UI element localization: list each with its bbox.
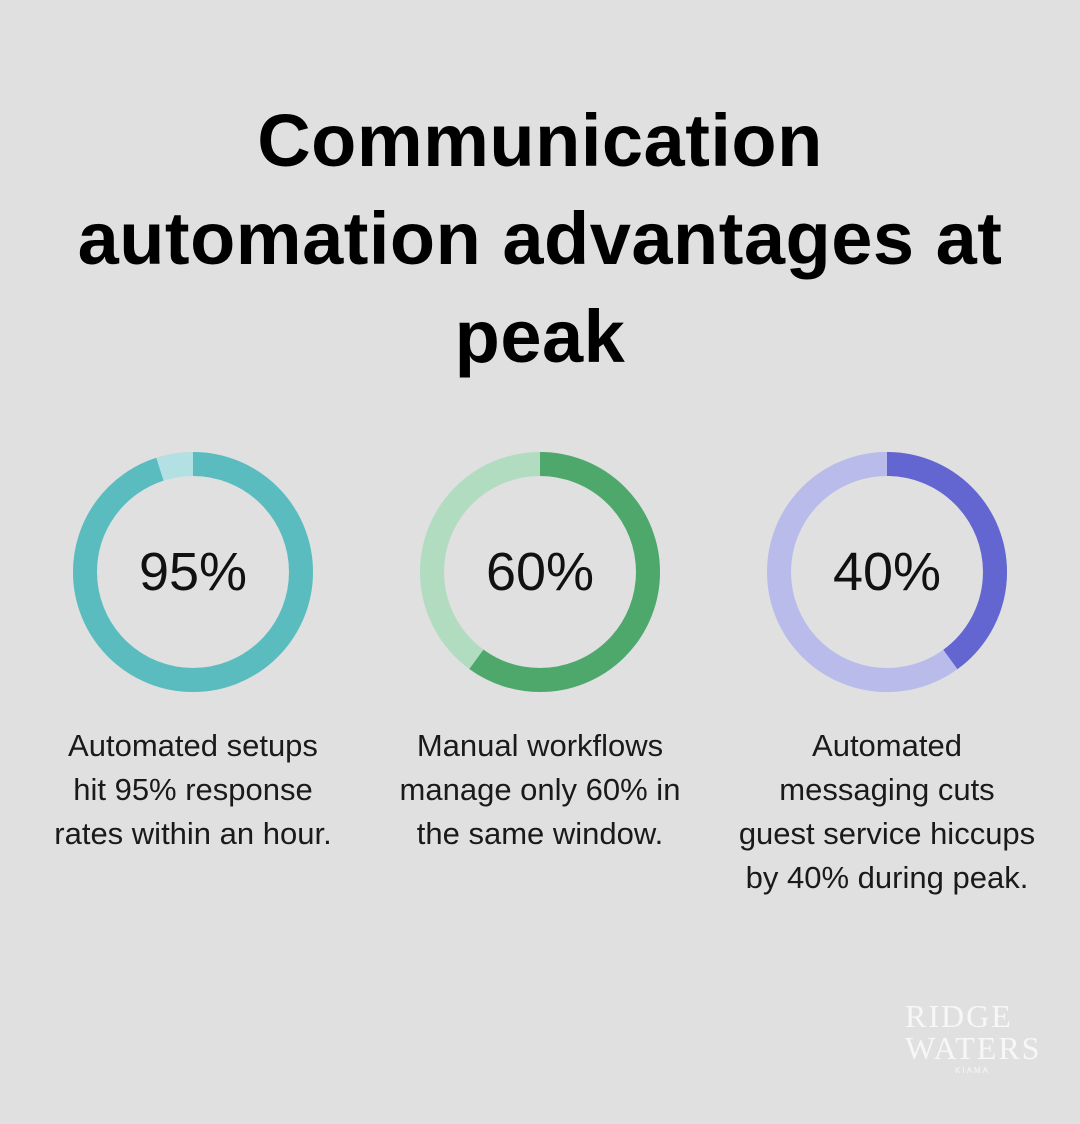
- ring: 60%: [420, 452, 660, 692]
- logo: [905, 998, 1041, 1075]
- logo: WATERS: [905, 1030, 1041, 1066]
- text: 40% description: Automated: [812, 728, 962, 763]
- text: 60% description: [400, 728, 680, 851]
- title: Communication: [257, 99, 823, 182]
- text: 95% description: hit 95% response: [73, 772, 313, 807]
- text: 95% description: Automated setups: [68, 728, 318, 763]
- ring: 95%: [73, 452, 313, 692]
- logo: KIAMA: [955, 1066, 990, 1075]
- ring: 60%: 60%: [486, 542, 594, 602]
- title: [78, 99, 1002, 378]
- text: 60% description: Manual workflows: [417, 728, 663, 763]
- text: 95% description: rates within an hour.: [54, 816, 332, 851]
- text: 40% description: by 40% during peak.: [746, 860, 1028, 895]
- text: 60% description: the same window.: [417, 816, 663, 851]
- text: 60% description: manage only 60% in: [400, 772, 680, 807]
- logo: RIDGE: [905, 998, 1013, 1034]
- text: 40% description: guest service hiccups: [739, 816, 1035, 851]
- text: 40% description: messaging cuts: [779, 772, 995, 807]
- ring: 40%: [767, 452, 1007, 692]
- text: 40% description: [739, 728, 1035, 895]
- ring: 95%: 95%: [139, 542, 247, 602]
- title: peak: [455, 295, 625, 378]
- text: 95% description: [54, 728, 332, 851]
- title: automation advantages at: [78, 197, 1002, 280]
- ring: 40%: 40%: [833, 542, 941, 602]
